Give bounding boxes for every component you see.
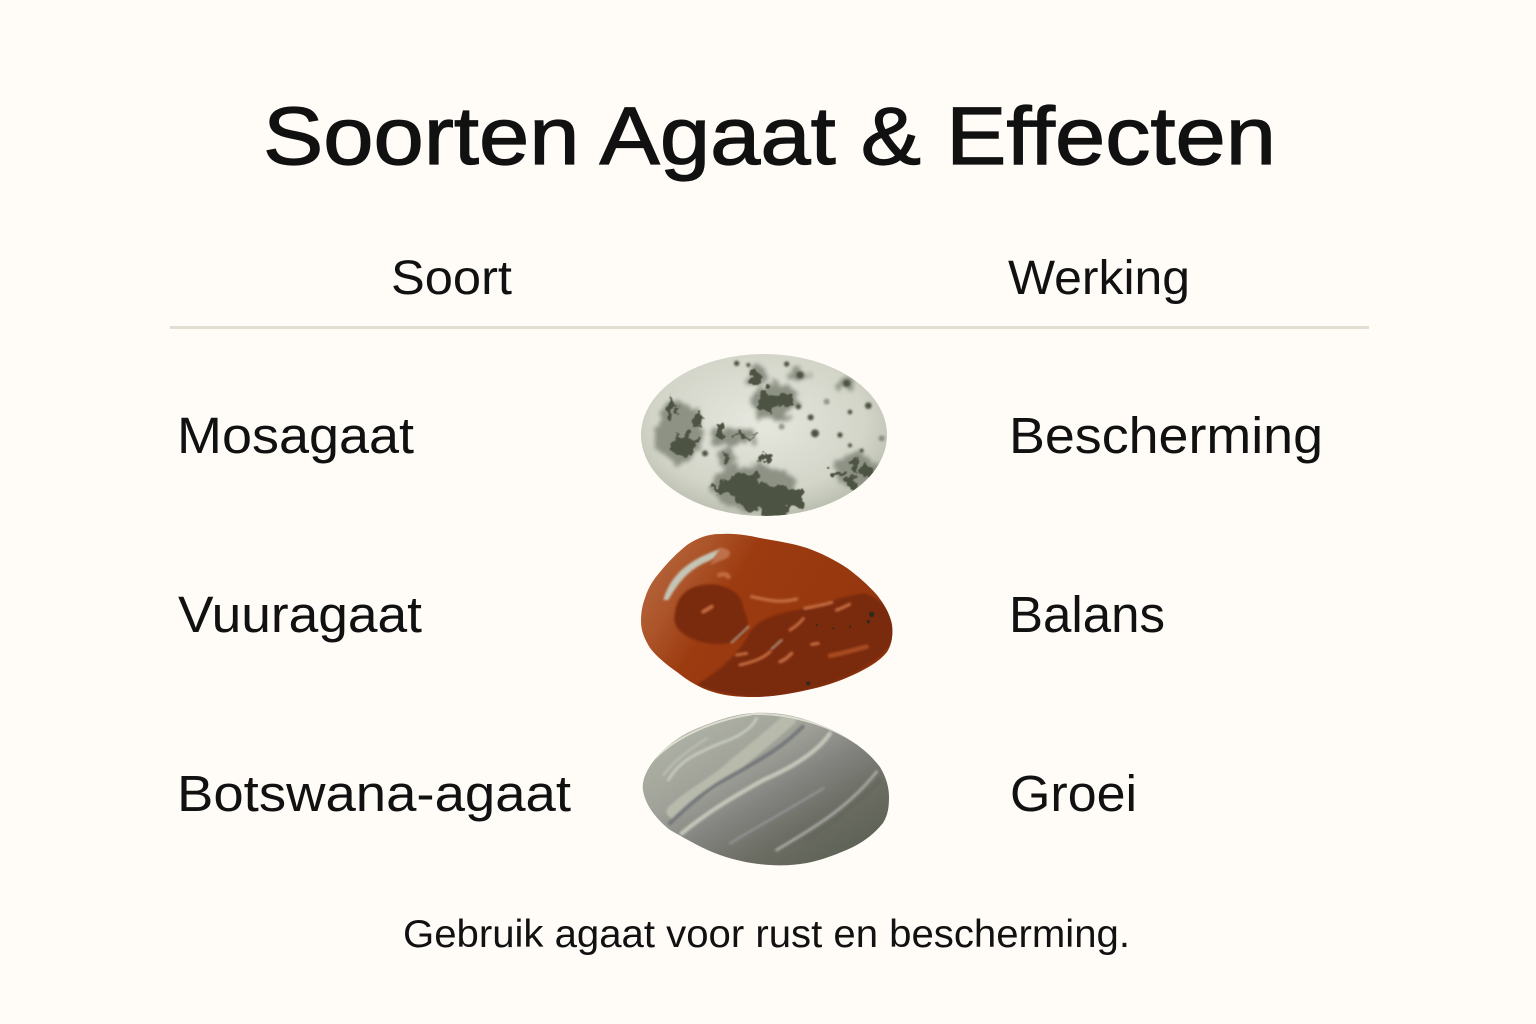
row 1 effect: Bescherming: Bescherming — [1009, 407, 1323, 464]
row 2 name: Vuuragaat: Vuuragaat — [178, 586, 422, 643]
column heading: Werking: Werking — [1008, 252, 1190, 305]
row 3 name: Botswana-agaat: Botswana-agaat — [177, 765, 571, 822]
icon: moss agate stone — [641, 354, 887, 516]
header divider — [170, 326, 1369, 329]
row 3 effect: Groei: Groei — [1010, 765, 1137, 822]
footer note: Gebruik agaat voor rust en bescherming. — [403, 913, 1130, 956]
row 1 name: Mosagaat: Mosagaat — [177, 407, 414, 464]
row 2 effect: Balans: Balans — [1009, 586, 1165, 643]
icon: fire agate stone — [641, 534, 897, 697]
column heading: Soort: Soort — [391, 252, 512, 305]
title: Soorten Agaat & Effecten — [263, 91, 1276, 182]
icon: Botswana agate stone — [643, 713, 889, 865]
